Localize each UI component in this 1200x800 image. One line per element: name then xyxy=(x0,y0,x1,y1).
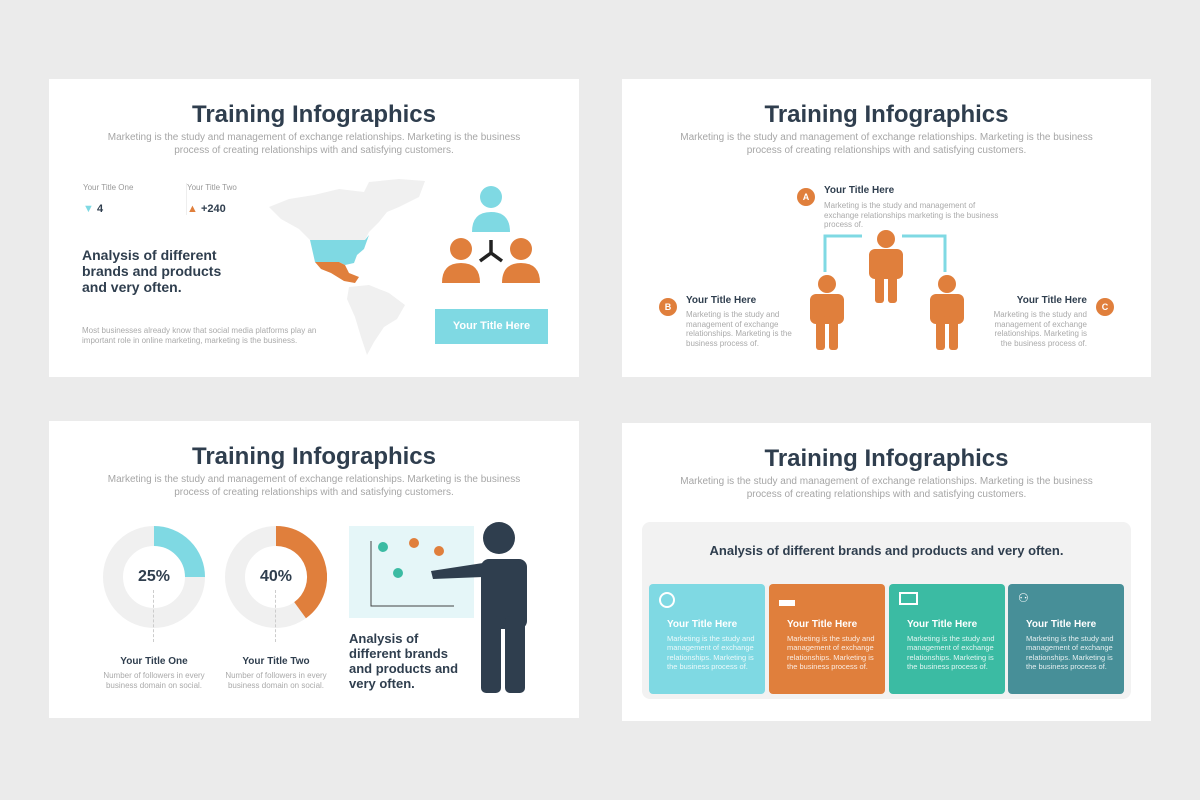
people diagram xyxy=(810,230,964,350)
donut 25% xyxy=(103,526,205,690)
donut 25%: Your Title One xyxy=(120,656,188,667)
heading text: Analysis of different xyxy=(82,247,217,263)
stat one: ▼ 4 xyxy=(83,202,103,214)
title: Training Infographics xyxy=(764,445,1009,472)
stat one: Your Title One xyxy=(83,183,133,192)
panel: bottom-left xyxy=(49,421,579,718)
panel: top-right: Your Title Here xyxy=(824,185,894,196)
panel: top-right: Marketing is the study and management of exchange relationships. Marketing is the business process of. xyxy=(686,310,792,348)
title: Training Infographics xyxy=(192,101,436,128)
donut 40%: 40% xyxy=(260,568,292,585)
card 3: Your Title Here xyxy=(907,619,977,630)
heading text xyxy=(82,247,221,295)
button: Your Title Here xyxy=(453,320,530,332)
subtitle: Marketing is the study and management of exchange relationships. Marketing is the business xyxy=(108,132,520,143)
icon: hierarchy people xyxy=(442,186,540,283)
subtitle: process of creating relationships with and satisfying customers. xyxy=(174,486,454,498)
card 2 xyxy=(769,584,885,694)
card 3: Marketing is the study and management of exchange relationships. Marketing is the business process of. xyxy=(907,634,995,671)
title: Training Infographics xyxy=(764,101,1009,128)
subtitle xyxy=(108,132,520,156)
card container xyxy=(642,522,1131,699)
presenter board xyxy=(349,522,527,693)
panel: bottom-right xyxy=(622,423,1151,721)
heading text: brands and products xyxy=(82,263,221,279)
subtitle: process of creating relationships with and satisfying customers. xyxy=(174,144,454,156)
stat two: Your Title Two xyxy=(187,183,237,192)
button xyxy=(435,309,548,344)
panel: top-right: Your Title Here xyxy=(1017,295,1087,306)
panel: top-right: Marketing is the study and management of exchange relationships marketing is the business process of. xyxy=(824,201,998,229)
subtitle: Marketing is the study and management of exchange relationships. Marketing is the business xyxy=(108,474,520,485)
heading text: and products and xyxy=(349,661,458,676)
panel: top-right: B xyxy=(665,302,671,312)
stat one xyxy=(83,183,134,214)
panel: top-right xyxy=(622,79,1151,377)
stat two xyxy=(186,183,266,214)
subtitle: process of creating relationships with and satisfying customers. xyxy=(747,144,1026,156)
card 4: Your Title Here xyxy=(1026,619,1096,630)
subtitle: Marketing is the study and management of exchange relationships. Marketing is the business xyxy=(680,476,1093,487)
subtitle xyxy=(108,474,520,498)
card 1: Your Title Here xyxy=(667,619,737,630)
heading text xyxy=(349,631,458,691)
panel: top-left xyxy=(49,79,579,377)
container heading: Analysis of different brands and products and very often. xyxy=(710,543,1063,558)
item B xyxy=(659,295,792,348)
map xyxy=(270,179,425,354)
heading text: very often. xyxy=(349,676,415,691)
donut 40%: Your Title Two xyxy=(242,656,310,667)
panel: top-right: C xyxy=(1102,302,1108,312)
stat two: ▲ +240 xyxy=(187,202,226,214)
card 2: Your Title Here xyxy=(787,619,857,630)
card 4: Marketing is the study and management of exchange relationships. Marketing is the business process of. xyxy=(1026,634,1114,671)
subtitle: Marketing is the study and management of exchange relationships. Marketing is the business xyxy=(680,132,1093,143)
item A xyxy=(797,185,998,229)
subtitle xyxy=(680,132,1093,156)
card 2: Marketing is the study and management of exchange relationships. Marketing is the business process of. xyxy=(787,634,875,671)
donut 40%: Number of followers in every business domain on social. xyxy=(225,671,327,690)
card 1 xyxy=(649,584,765,694)
donut 25%: 25% xyxy=(138,568,170,585)
panel: top-right: Your Title Here xyxy=(686,295,756,306)
item C xyxy=(994,295,1114,348)
subtitle xyxy=(680,476,1093,500)
card 4: ⚇ xyxy=(1018,591,1029,605)
card 4 xyxy=(1008,584,1124,694)
heading text: Analysis of xyxy=(349,631,418,646)
panel: top-right: A xyxy=(803,192,809,202)
heading text: different brands xyxy=(349,646,448,661)
donut 25%: Number of followers in every business domain on social. xyxy=(103,671,205,690)
donut 40% xyxy=(225,526,327,690)
card 1: Marketing is the study and management of exchange relationships. Marketing is the business process of. xyxy=(667,634,755,671)
subtitle: process of creating relationships with and satisfying customers. xyxy=(747,488,1026,500)
card 3 xyxy=(889,584,1005,694)
heading text: and very often. xyxy=(82,279,182,295)
panel: top-right: Marketing is the study and management of exchange relationships. Marketing is the business process of. xyxy=(994,310,1087,348)
title: Training Infographics xyxy=(192,443,436,470)
body text: Most businesses already know that social media platforms play an important role in online marketing, marketing is the business. xyxy=(82,326,316,344)
